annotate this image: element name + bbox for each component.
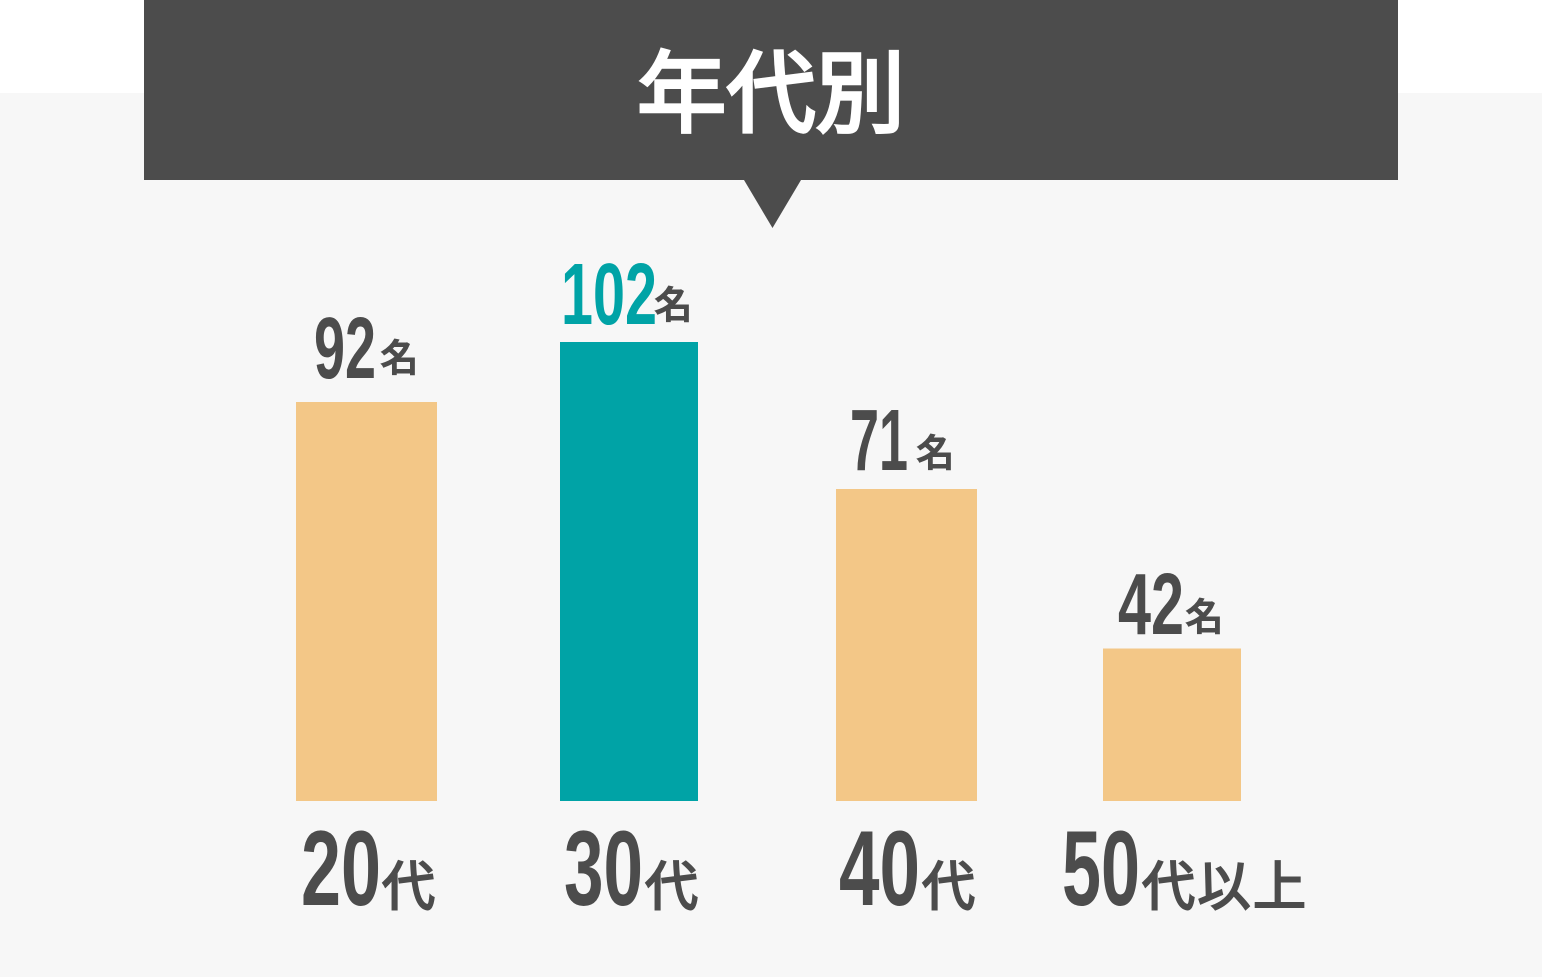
value: 92: 名	[381, 328, 418, 382]
label: 50s and over: 50	[1062, 808, 1140, 928]
label: 40s: 代	[922, 845, 975, 921]
label: 50s and over: 代以上	[1142, 845, 1306, 921]
label: 40s: 40	[839, 808, 920, 928]
bar chart	[296, 246, 1306, 928]
label: 20s: 代	[382, 845, 435, 921]
value: 71: 名	[917, 423, 954, 477]
title: 年代別	[637, 22, 905, 151]
value: 71: 71	[850, 392, 908, 489]
label: 30s: 代	[645, 845, 698, 921]
value: 102: 名	[655, 275, 692, 329]
label: 30s: 30	[564, 808, 643, 928]
value: 42: 名	[1186, 587, 1223, 641]
bar: 40s	[836, 489, 977, 801]
label: 50s and over	[1062, 808, 1306, 928]
value: 92: 92	[314, 300, 376, 397]
bar: 50s and over	[1103, 648, 1241, 801]
value: 102: 102	[561, 246, 657, 343]
label: 20s: 20	[301, 808, 381, 928]
bar: 20s	[296, 402, 437, 801]
title banner	[144, 0, 1398, 228]
bar: 30s	[560, 342, 698, 801]
value: 42: 42	[1118, 556, 1184, 653]
